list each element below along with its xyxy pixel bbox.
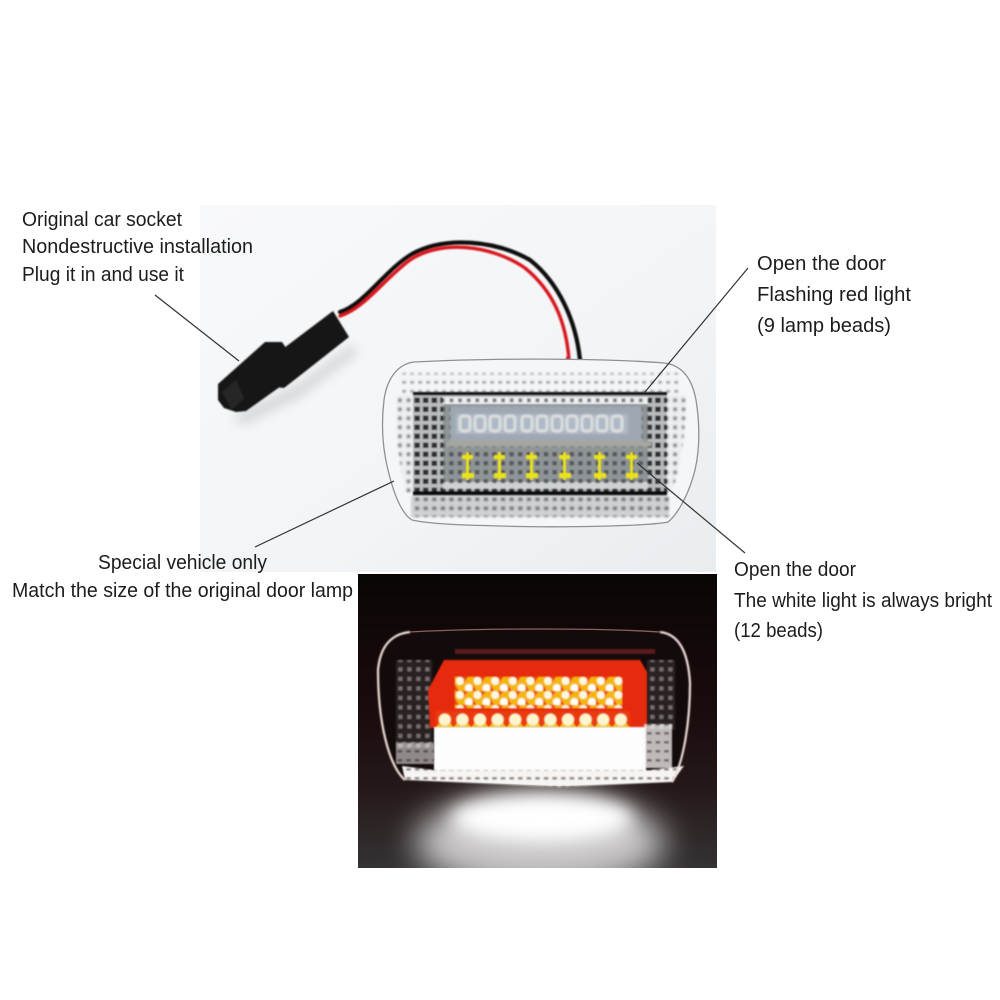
- callout: flashing red light: Open the door: [757, 253, 886, 275]
- callout: white light: The white light is always bright: [734, 590, 992, 612]
- callout: white light: [734, 559, 992, 642]
- leader line: red light: [645, 268, 748, 392]
- callout: original car socket: Original car socket: [22, 209, 182, 231]
- callout: flashing red light: (9 lamp beads): [757, 315, 891, 337]
- white LED band: [402, 724, 684, 787]
- lower white LED row (yellow contacts): [462, 452, 638, 480]
- ground glow: [415, 794, 665, 890]
- lit lens: [378, 629, 690, 787]
- callout: white light: (12 beads): [734, 620, 823, 642]
- lens housing: [383, 359, 699, 527]
- callout: original car socket: [22, 209, 253, 286]
- callout: original car socket: Nondestructive installation: [22, 236, 253, 258]
- leader line: white light: [637, 463, 745, 553]
- photo: lamp lit at night: [358, 574, 717, 890]
- callout: original car socket: Plug it in and use it: [22, 264, 184, 286]
- callout: special vehicle size: [12, 552, 353, 602]
- callout: white light: Open the door: [734, 559, 856, 581]
- leader line: size match: [255, 481, 394, 547]
- leader line: socket: [155, 295, 239, 361]
- callout: flashing red light: [757, 253, 911, 337]
- red LED band: [428, 660, 647, 728]
- callout: special vehicle size: Special vehicle only: [98, 552, 267, 574]
- photo: door lamp with wiring: [200, 205, 716, 572]
- connector plug: [218, 311, 349, 412]
- wire harness: [340, 243, 580, 372]
- dark frame with LED board: [413, 392, 667, 496]
- connector shadow: [232, 345, 358, 424]
- upper red LED row (unlit): [446, 406, 652, 447]
- callout: flashing red light: Flashing red light: [757, 284, 911, 306]
- callout: special vehicle size: Match the size of the original door lamp: [12, 580, 353, 602]
